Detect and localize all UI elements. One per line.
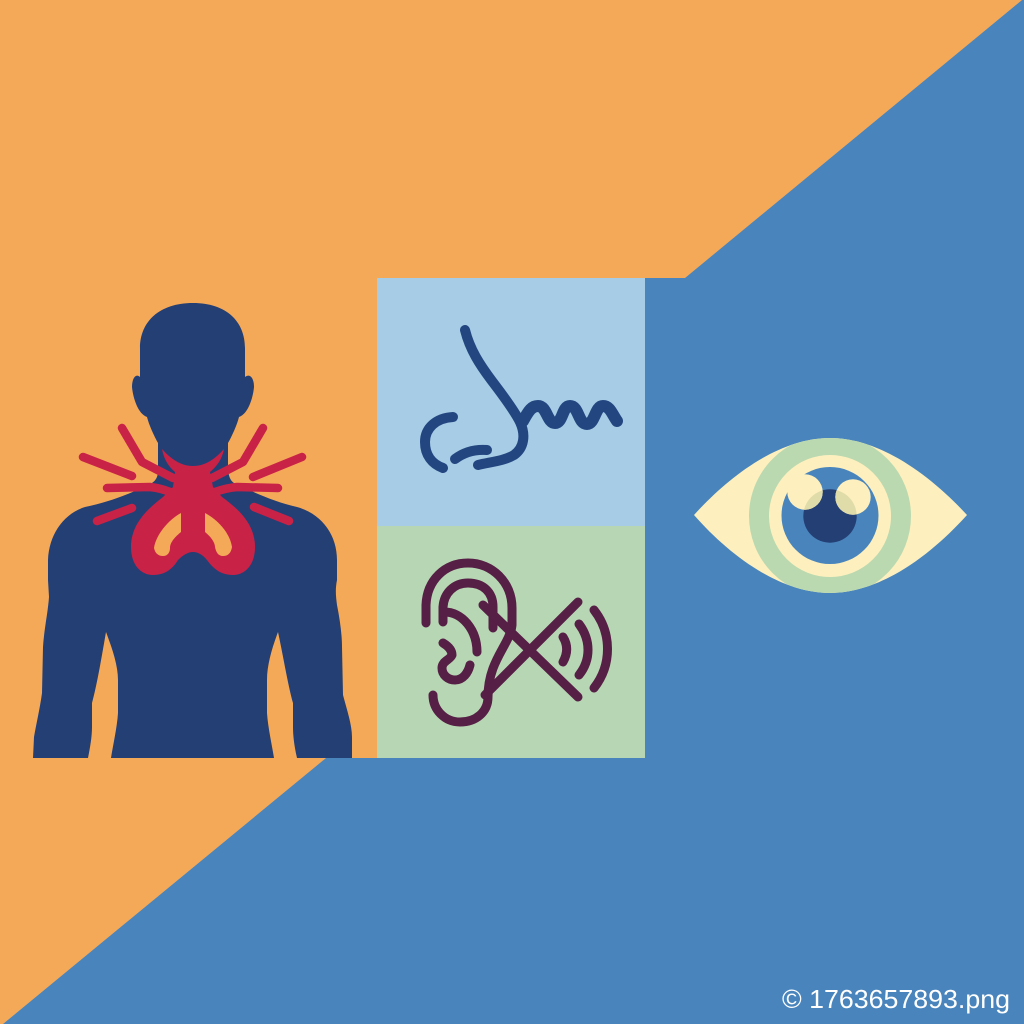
panel: ear tile [377, 526, 645, 758]
icon: human silhouette with throat highlighted [33, 303, 352, 758]
body silhouette [33, 303, 352, 758]
iris [782, 467, 878, 564]
icon: crossed-out ear with sound waves [426, 563, 608, 722]
caption: file watermark: © 1763657893.png [782, 984, 1010, 1014]
panel: nose tile [377, 278, 645, 526]
pain rays [83, 428, 302, 521]
eye white [694, 438, 967, 593]
icon: eye [694, 438, 967, 593]
green ring [759, 445, 901, 587]
pupil [803, 489, 857, 543]
thyroid left opening [154, 513, 181, 556]
thyroid right opening [205, 513, 232, 556]
icon: nose with smell wave [425, 330, 617, 468]
thyroid organ [131, 449, 255, 575]
highlight overlap on pupil [804, 490, 856, 515]
highlights [787, 474, 823, 510]
